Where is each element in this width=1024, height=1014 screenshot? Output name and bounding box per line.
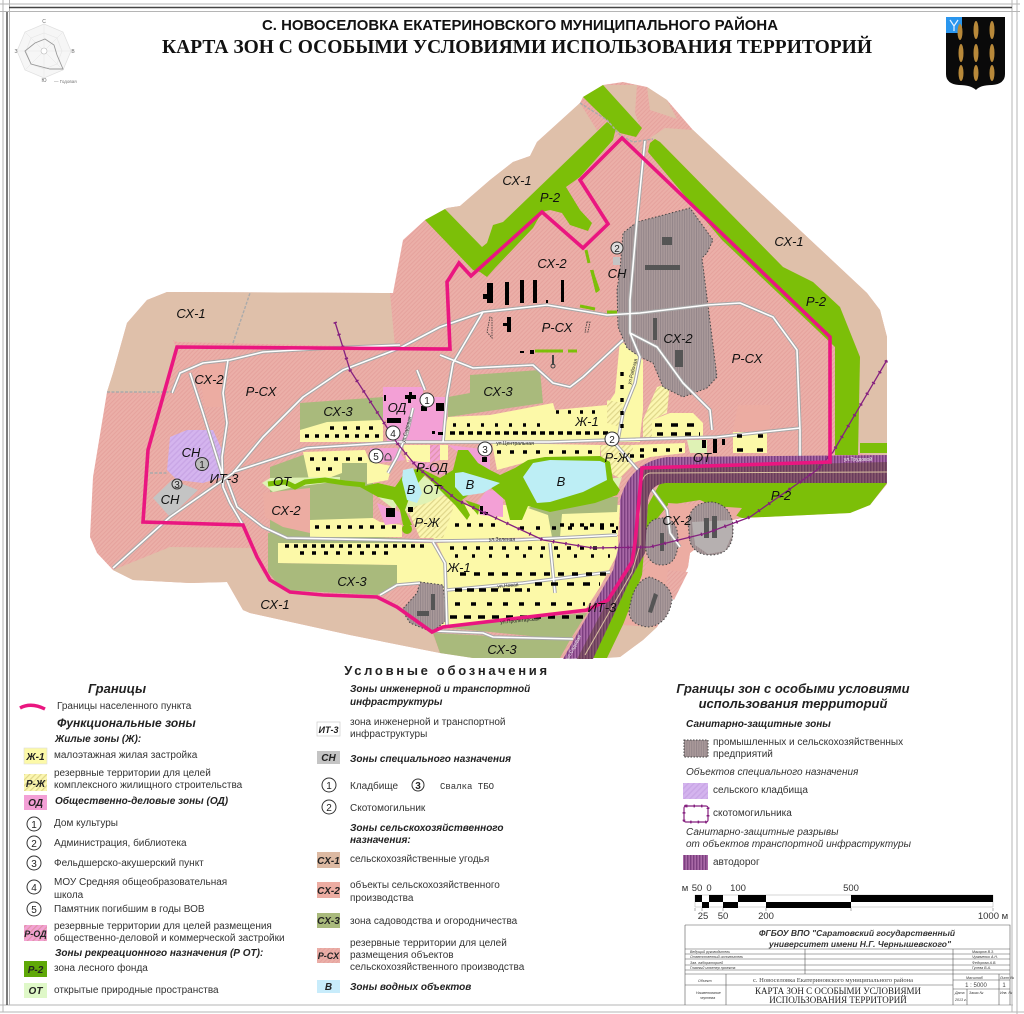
zone labels: СН: [182, 445, 201, 460]
heading: borders: Границы: [88, 681, 146, 696]
radar chart: wind rose: З: [14, 49, 18, 55]
icon: coat of arms: [946, 17, 1005, 90]
map markers: 3: [482, 445, 488, 456]
zone labels: СХ-3: [323, 404, 353, 419]
zone labels: В: [407, 482, 416, 497]
title block table: ФГБОУ ВПО "Саратовский государственный: [759, 928, 956, 938]
zone labels: ИТ-3: [588, 600, 617, 615]
heading: special conditions: Границы зон с особыми условиями: [676, 681, 910, 696]
swatch roads: [683, 855, 708, 870]
radar chart: wind rose: — Годовая: [54, 79, 77, 84]
heading: special: Зоны специального назначения: [350, 754, 511, 765]
swatch ОД: [24, 795, 47, 810]
text: engineering zone: инфраструктуры: [350, 728, 427, 740]
title block table: Наименование: [696, 991, 721, 995]
special markers: Скотомогильник: [350, 803, 426, 814]
text: low-rise: малоэтажная жилая застройка: [54, 750, 198, 761]
text cemetery: сельского кладбища: [713, 784, 808, 796]
heading: residential: Жилые зоны (Ж):: [54, 734, 141, 745]
zone labels: Р-СХ: [542, 320, 574, 335]
scale bar: м: [682, 883, 688, 894]
buildings inside protection zones: [417, 237, 717, 616]
title block table: ИСПОЛЬЗОВАНИЯ ТЕРРИТОРИЙ: [769, 995, 907, 1005]
swatch В: В: [325, 982, 332, 993]
street labels: ул.Новая: [497, 582, 519, 590]
swatch ОД: ОД: [28, 798, 43, 809]
zone labels: СХ-1: [502, 173, 532, 188]
swatch Р-СХ: [317, 948, 340, 963]
text СХ-3: зона садоводства и огородничества: [350, 916, 518, 927]
heading: agricultural: назначения:: [350, 835, 411, 846]
text: reserve residential: резервные территории для целей: [54, 768, 211, 779]
heading: functional zones: Функциональные зоны: [57, 716, 196, 730]
zones: low-rise residential Ж-1: [278, 340, 767, 628]
map markers: 2: [609, 435, 615, 446]
zone labels: Ж-1: [574, 414, 599, 429]
street labels: ул.Трудовой: [844, 456, 872, 463]
scale bar: 200: [758, 911, 774, 922]
zones: public business ОД: [370, 387, 503, 525]
heading: special objects: Объектов специального назначения: [686, 766, 859, 778]
markers list: 3: [31, 859, 37, 870]
swatch СХ-2: СХ-2: [317, 886, 340, 897]
title block table: Зав. лабораторией: [690, 961, 723, 965]
swatch ОТ: [24, 983, 47, 998]
zone labels: СХ-1: [260, 597, 290, 612]
legend heading: Условные обозначения: [344, 663, 550, 678]
map markers: 1: [199, 460, 205, 471]
text Р-СХ: размещения объектов: [350, 949, 454, 961]
heading: gaps: от объектов транспортной инфраструктуры: [686, 838, 912, 850]
title: КАРТА ЗОН С ОСОБЫМИ УСЛОВИЯМИ ИСПОЛЬЗОВАНИЯ ТЕРРИТОРИЙ: [162, 35, 872, 58]
zone labels: Р-Ж: [605, 450, 631, 465]
zones: reserve business Р-ОД: [407, 445, 447, 475]
swatch Р-2: [24, 961, 47, 977]
markers list: 1: [31, 820, 37, 831]
radar chart: wind rose: [14, 19, 77, 84]
zones: agricultural land СХ-1: [107, 85, 887, 658]
markers list: 4: [31, 883, 37, 894]
panel: legend right column: [676, 681, 912, 870]
swatch Р-2: Р-2: [28, 965, 44, 976]
text: engineering zone: зона инженерной и транспортной: [350, 717, 506, 728]
title: С. НОВОСЕЛОВКА ЕКАТЕРИНОВСКОГО МУНИЦИПАЛЬНОГО РАЙОНА: [262, 16, 778, 34]
zone labels: Р-СХ: [732, 351, 764, 366]
heading: recreation: Зоны рекреационного назначения (Р ОТ):: [55, 948, 263, 959]
zone labels: Р-Ж: [415, 515, 441, 530]
zone labels: СХ-2: [663, 331, 693, 346]
boundary sample: [20, 705, 45, 709]
heading: water: Зоны водных объектов: [350, 981, 471, 993]
text: reserve business: общественно-деловой и коммерческой застройки: [54, 932, 285, 944]
street labels: ул.Пролетарская: [500, 616, 540, 626]
map markers: 5: [373, 452, 379, 463]
text СХ-1: сельскохозяйственные угодья: [350, 854, 489, 865]
street labels: ул.Рабочая: [627, 358, 639, 385]
scale bar: 500: [843, 883, 859, 894]
roads: [107, 103, 800, 639]
special markers: [322, 778, 494, 814]
map markers: 3: [174, 480, 180, 491]
cemetery СН: [167, 430, 223, 483]
title block table: Федорова А.В.: [972, 961, 996, 965]
zone labels: Ж-1: [446, 560, 471, 575]
title block table: Ведущий руководитель: [690, 950, 730, 954]
zone labels: ОТ: [693, 450, 712, 465]
markers list: Администрация, библиотека: [54, 837, 187, 849]
road protection band: [563, 455, 887, 659]
title block table: 1: [1002, 983, 1006, 989]
swatch Р-СХ: Р-СХ: [318, 951, 340, 961]
zones: reclaimed pink СХ-2 patch lower right: [623, 503, 742, 627]
title block table: с. Новоселовка Екатериновского муниципального района: [753, 977, 913, 984]
title block table: [685, 925, 1014, 1005]
scale bar: 100: [730, 883, 746, 894]
zones: small garden strip: [528, 497, 618, 537]
map base: reserve agricultural territory: [90, 82, 887, 658]
heading: public business: Общественно-деловые зоны (ОД): [55, 795, 229, 807]
swatch Р-ОД: [24, 925, 47, 941]
text: boundary: Границы населенного пункта: [57, 701, 192, 712]
title block table: Заказ №: [969, 991, 983, 995]
text СХ-2: производства: [350, 893, 414, 904]
zone labels: СН: [608, 266, 627, 281]
title block table: Инв. №: [1000, 991, 1012, 995]
title: [162, 16, 872, 58]
markers list: Фельдшерско-акушерский пункт: [54, 858, 204, 869]
scale bar: 50: [718, 911, 728, 922]
residential and farm buildings: [285, 250, 765, 617]
zone labels: В: [557, 474, 566, 489]
scale bar: 0: [706, 883, 712, 894]
title block table: Масштаб: [966, 976, 984, 980]
panel: legend left column: [20, 681, 285, 998]
zone labels: Р-2: [806, 294, 827, 309]
swatch ОТ: ОТ: [29, 986, 43, 997]
street labels: [401, 358, 872, 661]
zone labels: Р-2: [540, 190, 561, 205]
text roads: автодорог: [713, 857, 760, 868]
radar chart: wind rose: В: [71, 49, 75, 55]
map markers: 2: [614, 244, 620, 255]
zone labels: СХ-1: [774, 234, 804, 249]
title block table: Гусева В.А.: [972, 966, 991, 970]
markers list: МОУ Средняя общеобразовательная: [54, 877, 227, 888]
title block table: 1 : 5000: [965, 983, 988, 989]
swatch СХ-1: СХ-1: [317, 856, 340, 867]
street labels: ул.Центральная: [496, 441, 534, 447]
text Р-СХ: сельскохозяйственного производства: [350, 962, 525, 973]
zone labels: В: [466, 477, 475, 492]
street labels: ул.Садовая: [565, 634, 583, 661]
zones: salmon СХ-2: [198, 363, 770, 533]
text: forest: зона лесного фонда: [54, 962, 148, 974]
special markers: Свалка ТБО: [440, 782, 494, 792]
swatch Р-Ж: [24, 774, 47, 791]
stream and green belt: [268, 450, 620, 534]
text industrial: промышленных и сельскохозяйственных: [713, 737, 903, 748]
zone labels: СХ-2: [537, 256, 567, 271]
zone labels: СХ-2: [662, 513, 692, 528]
swatch СН: [317, 751, 340, 764]
radar chart: wind rose: С: [42, 19, 46, 25]
water bodies В: [402, 460, 607, 503]
zones: gardening СХ-3: [268, 370, 587, 658]
settlement boundary: [143, 138, 830, 632]
swatch СХ-1: [317, 852, 340, 868]
title block table: 2013 г.: [954, 998, 967, 1002]
special markers: 3: [415, 781, 421, 792]
zone labels: ОТ: [273, 474, 292, 489]
zone labels: ОТ: [423, 482, 442, 497]
zone labels: Р-СХ: [246, 384, 278, 399]
zones: reserve residential Р-Ж: [403, 383, 670, 538]
swatch ИТ-3: ИТ-3: [319, 725, 338, 735]
text: reserve residential: комплексного жилищного строительства: [54, 780, 243, 791]
scale bar: 1000 м: [978, 911, 1008, 922]
markers list: Дом культуры: [54, 818, 118, 829]
zone labels: Р-2: [771, 488, 792, 503]
title block table: Главный инженер проекта: [690, 966, 735, 970]
livestock burial protection arc: [335, 322, 887, 548]
text: open space: открытые природные пространства: [54, 985, 219, 996]
zones: open space ОТ: [262, 440, 707, 510]
text Р-СХ: резервные территории для целей: [350, 938, 507, 949]
zone labels: СХ-1: [176, 306, 206, 321]
landfill СН: [153, 480, 198, 517]
swatch В: [317, 980, 340, 993]
swatch burial: [684, 806, 708, 822]
scale bar: 50: [692, 883, 702, 894]
zone labels: Р-ОД: [416, 460, 448, 475]
lighter part of protection zone outside territory: [692, 520, 732, 554]
title block table: Макаров В.З.: [972, 950, 994, 954]
swatch СХ-2: [317, 882, 340, 898]
swatch Ж-1: Ж-1: [25, 752, 45, 763]
text: reserve business: резервные территории для целей размещения: [54, 921, 272, 932]
swatch ИТ-3: [317, 722, 340, 736]
zone labels: СХ-3: [487, 642, 517, 657]
swatch industrial: [684, 740, 708, 757]
zone labels: ОД: [388, 400, 406, 415]
text СХ-2: объекты сельскохозяйственного: [350, 880, 500, 891]
zone labels: СХ-3: [337, 574, 367, 589]
special markers: Кладбище: [350, 780, 398, 792]
zone labels: [161, 173, 827, 657]
heading: agricultural: Зоны сельскохозяйственного: [350, 823, 504, 834]
swatch cemetery: [683, 783, 708, 799]
heading: special conditions: использования территорий: [699, 696, 887, 711]
title block table: Объект: [698, 979, 712, 983]
sanitary protection zones: [402, 208, 733, 632]
special markers: 1: [326, 781, 332, 792]
title block table: Ответственный исполнитель: [690, 955, 743, 959]
panel: legend middle column: [317, 684, 530, 993]
zone labels: СХ-2: [194, 372, 224, 387]
title block table: чертежа: [700, 996, 715, 1000]
scale bar: [682, 883, 1008, 922]
markers list: [27, 817, 227, 916]
markers list: 2: [31, 839, 37, 850]
radar chart: wind rose: Ю: [41, 78, 47, 84]
title block table: Дата: [954, 991, 964, 995]
markers list: Памятник погибшим в годы ВОВ: [54, 903, 205, 915]
panel: land use map: [90, 82, 887, 661]
street labels: ул.Зеленая: [489, 537, 515, 543]
heading: engineering: инфраструктуры: [350, 696, 443, 708]
text industrial: предприятий: [713, 749, 773, 760]
street labels: ул.Садовая: [401, 416, 413, 444]
markers list: 5: [31, 905, 37, 916]
title block table: Чумаченко А.Н.: [972, 955, 998, 959]
zones: forest Р-2: [425, 85, 887, 658]
title block table: КАРТА ЗОН С ОСОБЫМИ УСЛОВИЯМИ: [755, 986, 922, 996]
swatch Р-ОД: Р-ОД: [24, 929, 47, 939]
swatch СХ-3: СХ-3: [317, 916, 340, 927]
heading: engineering: Зоны инженерной и транспортной: [350, 684, 530, 695]
map markers: 4: [390, 429, 396, 440]
title block table: университет имени Н.Г. Чернышевского": [768, 939, 952, 949]
swatch СН: СН: [321, 753, 336, 764]
zone labels: СХ-3: [483, 384, 513, 399]
swatch Р-Ж: Р-Ж: [26, 779, 46, 790]
swatch Ж-1: [24, 748, 47, 764]
zone labels: ИТ-3: [210, 471, 239, 486]
markers list: школа: [54, 890, 84, 901]
text burial: скотомогильника: [713, 808, 792, 819]
scale bar: 25: [698, 911, 708, 922]
zone labels: СН: [161, 492, 180, 507]
zone labels: СХ-2: [271, 503, 301, 518]
map markers: [172, 242, 623, 491]
title block table: Лист №: [999, 976, 1014, 980]
special markers: 2: [326, 803, 332, 814]
heading: gaps: Санитарно-защитные разрывы: [686, 827, 838, 838]
map markers: 1: [424, 396, 430, 407]
heading: sanitary: Санитарно-защитные зоны: [686, 719, 831, 730]
